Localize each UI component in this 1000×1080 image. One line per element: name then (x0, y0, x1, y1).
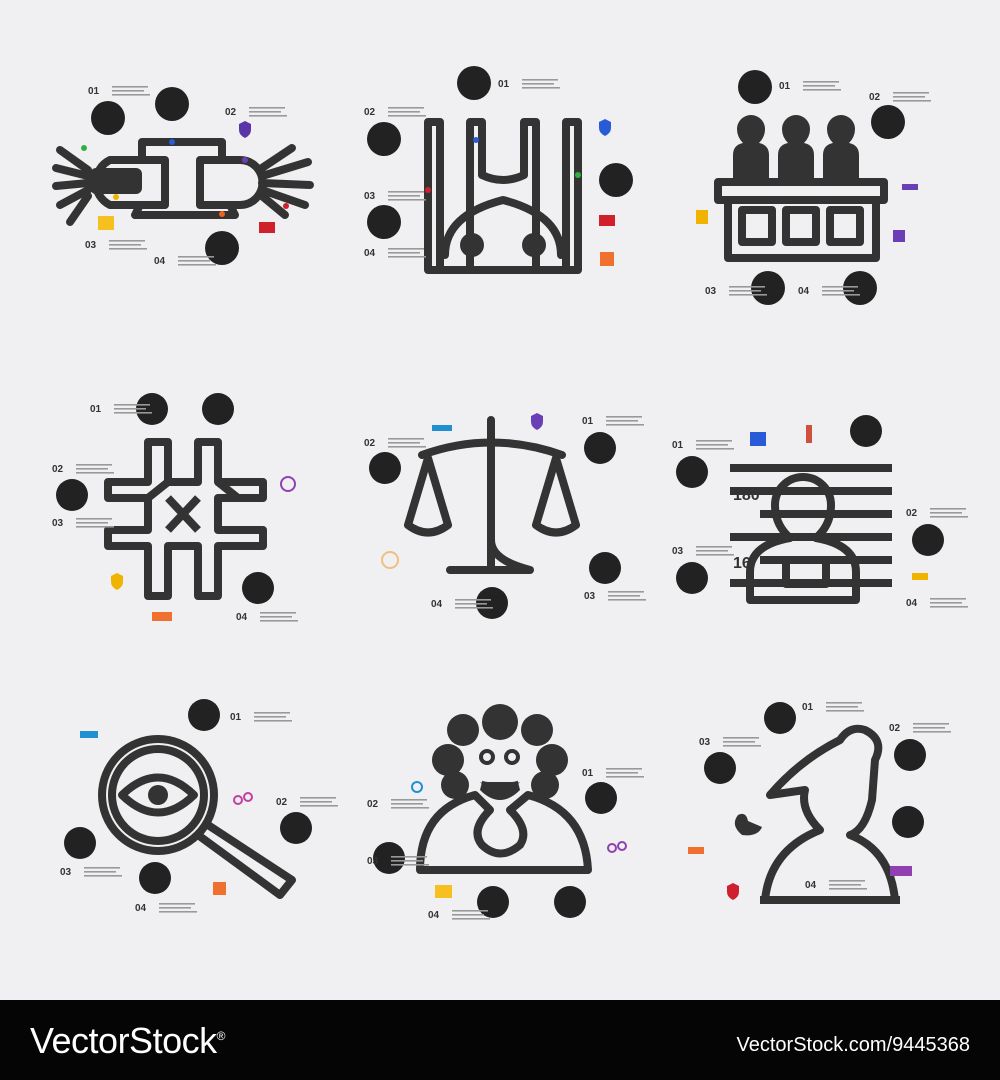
icon: lawyer (584, 432, 616, 464)
panel: prisoner behind bars: 04 (364, 248, 376, 259)
panel: mugshot: 180 (733, 487, 760, 504)
icon: scales (585, 782, 617, 814)
footer url: VectorStock.com/9445368 (737, 1034, 970, 1056)
icon: camera (599, 163, 633, 197)
panel: hash grid: 02 (52, 464, 64, 475)
panel: magnifier: 02 (276, 797, 288, 808)
panel: mugshot: 02 (906, 508, 918, 519)
panel: judge: 01 (582, 768, 594, 779)
panel: scales (364, 413, 646, 619)
panel: detective: 04 (805, 880, 817, 891)
panel: detective (688, 702, 951, 900)
panel: handcuffs: 03 (85, 240, 97, 251)
panel: scales: 04 (431, 599, 443, 610)
icon: badge (676, 562, 708, 594)
icon: brain (91, 101, 125, 135)
panel: mugshot (672, 415, 968, 609)
footer logo: VectorStock® (30, 1020, 225, 1061)
panel: jury (696, 70, 931, 305)
panel: prisoner behind bars: 03 (364, 191, 376, 202)
panel: magnifier: 03 (60, 867, 72, 878)
icon: briefcase (369, 452, 401, 484)
icon: ambulance (373, 842, 405, 874)
icon: files (367, 122, 401, 156)
icon: fingerprint (850, 415, 882, 447)
icon: passport (56, 479, 88, 511)
icon: badge (751, 271, 785, 305)
panel: jury: 03 (705, 286, 717, 297)
panel: jury: 01 (779, 81, 791, 92)
panel: judge: 03 (367, 856, 379, 867)
icon: ambulance (738, 70, 772, 104)
panel: mugshot: 16 (733, 555, 751, 572)
panel: scales: 03 (584, 591, 596, 602)
panel: judge: 02 (367, 799, 379, 810)
panel: jury: 02 (869, 92, 881, 103)
icon: badge (477, 886, 509, 918)
panel: handcuffs: 02 (225, 107, 237, 118)
panel: scales: 01 (582, 416, 594, 427)
icon: pen (155, 87, 189, 121)
panel: magnifier: 04 (135, 903, 147, 914)
icon: pen (188, 699, 220, 731)
icon: brain (704, 752, 736, 784)
panel: handcuffs (56, 86, 310, 267)
icon: passport (367, 205, 401, 239)
panel: magnifier (60, 699, 338, 914)
icon: passport (892, 806, 924, 838)
icon: lawyer (139, 862, 171, 894)
panel: jury: 04 (798, 286, 810, 297)
footer bar (0, 1000, 1000, 1080)
panel: mugshot: 04 (906, 598, 918, 609)
icon: hanging (280, 812, 312, 844)
panel: prisoner behind bars: 01 (498, 79, 510, 90)
panel: handcuffs: 04 (154, 256, 166, 267)
panel: detective: 03 (699, 737, 711, 748)
panel: handcuffs: 01 (88, 86, 100, 97)
panel: detective: 02 (889, 723, 901, 734)
panel: prisoner behind bars (364, 66, 633, 270)
panel: hash grid: 01 (90, 404, 102, 415)
icon: shield (239, 121, 251, 138)
icon: brain (554, 886, 586, 918)
panel: mugshot: 03 (672, 546, 684, 557)
panel: magnifier: 01 (230, 712, 242, 723)
panel: judge: 04 (428, 910, 440, 921)
icon: hanging (894, 739, 926, 771)
icon: brain (676, 456, 708, 488)
icon: briefcase (912, 524, 944, 556)
icon: pen (242, 572, 274, 604)
panel: mugshot: 01 (672, 440, 684, 451)
panel: scales: 02 (364, 438, 376, 449)
icon: brain (64, 827, 96, 859)
icon: passport (205, 231, 239, 265)
panel: hash grid: 03 (52, 518, 64, 529)
icon: safe (589, 552, 621, 584)
panel: hash grid (52, 393, 298, 623)
panel: prisoner behind bars: 02 (364, 107, 376, 118)
panel: detective: 01 (802, 702, 814, 713)
icon: bank (98, 216, 114, 230)
icon: brain (457, 66, 491, 100)
icon: brain (871, 105, 905, 139)
icon: magnifier (764, 702, 796, 734)
icon: brain (202, 393, 234, 425)
panel: judge (367, 704, 644, 921)
icon: magnifier (136, 393, 168, 425)
panel: hash grid: 04 (236, 612, 248, 623)
icon: magnifier (843, 271, 877, 305)
icon: files (476, 587, 508, 619)
icon: case (259, 222, 275, 233)
